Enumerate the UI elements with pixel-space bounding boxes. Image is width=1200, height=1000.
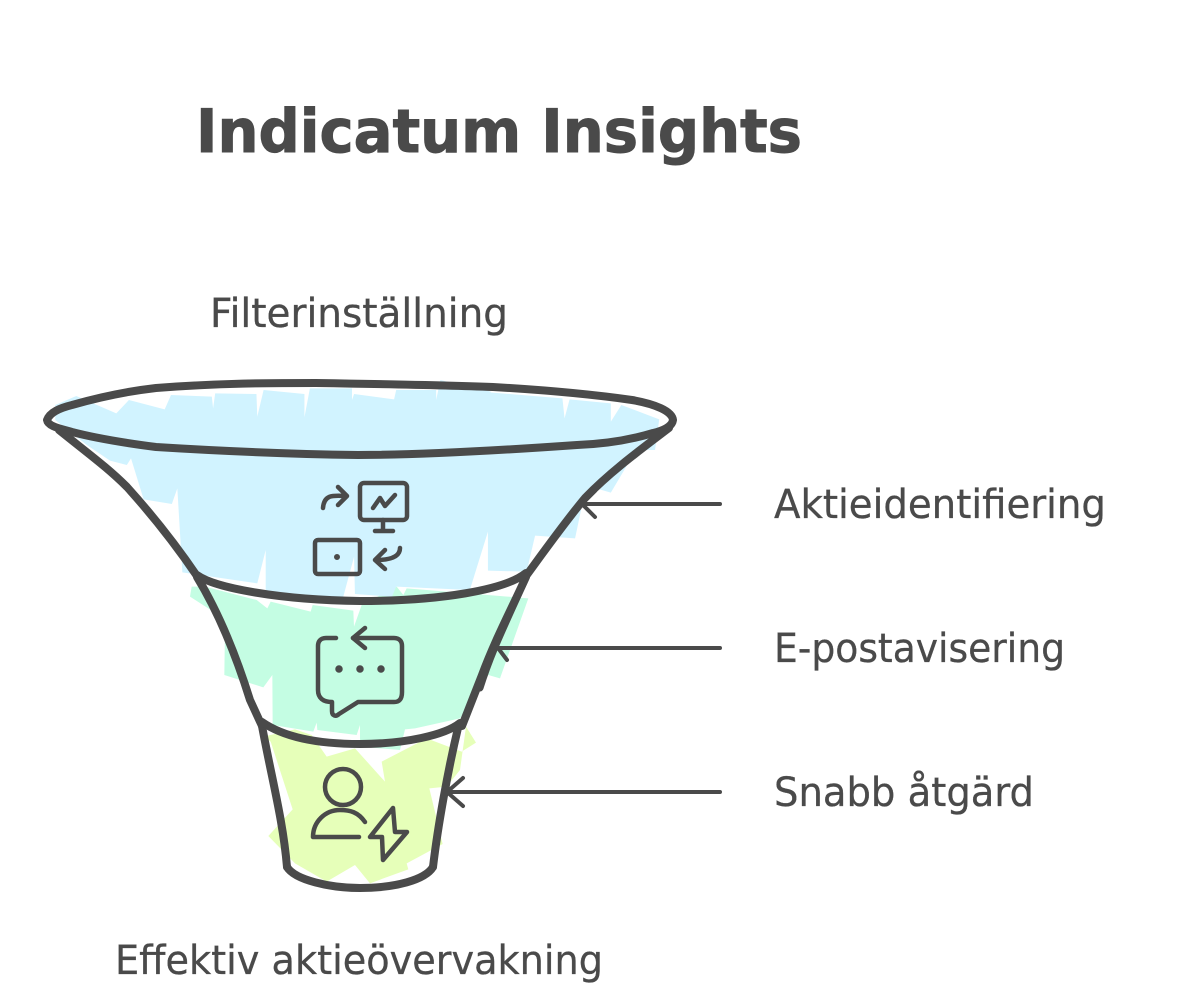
fill: green section [190, 587, 528, 750]
label: Aktieidentifiering: Aktieidentifiering [774, 482, 1106, 528]
icon: chat bubble with arrow [318, 628, 402, 716]
icon: monitor and tablet exchange [315, 483, 407, 574]
outline: funnel walls and rims [47, 383, 673, 888]
arrow: to Aktieidentifiering [582, 491, 720, 517]
label: bottom of funnel: Effektiv aktieövervakning [115, 938, 603, 984]
label: Snabb åtgärd: Snabb åtgärd [774, 770, 1034, 816]
icon: person with lightning bolt [313, 769, 407, 860]
fill: blue section [55, 380, 659, 603]
funnel [47, 380, 673, 888]
title: Indicatum Insights [196, 97, 802, 167]
arrow: to Snabb åtgärd [447, 778, 720, 806]
label: top of funnel: Filterinställning [210, 291, 508, 337]
label: E-postavisering: E-postavisering [774, 626, 1065, 672]
arrow: to E-postavisering [498, 648, 720, 660]
fill: yellow section [263, 727, 476, 883]
